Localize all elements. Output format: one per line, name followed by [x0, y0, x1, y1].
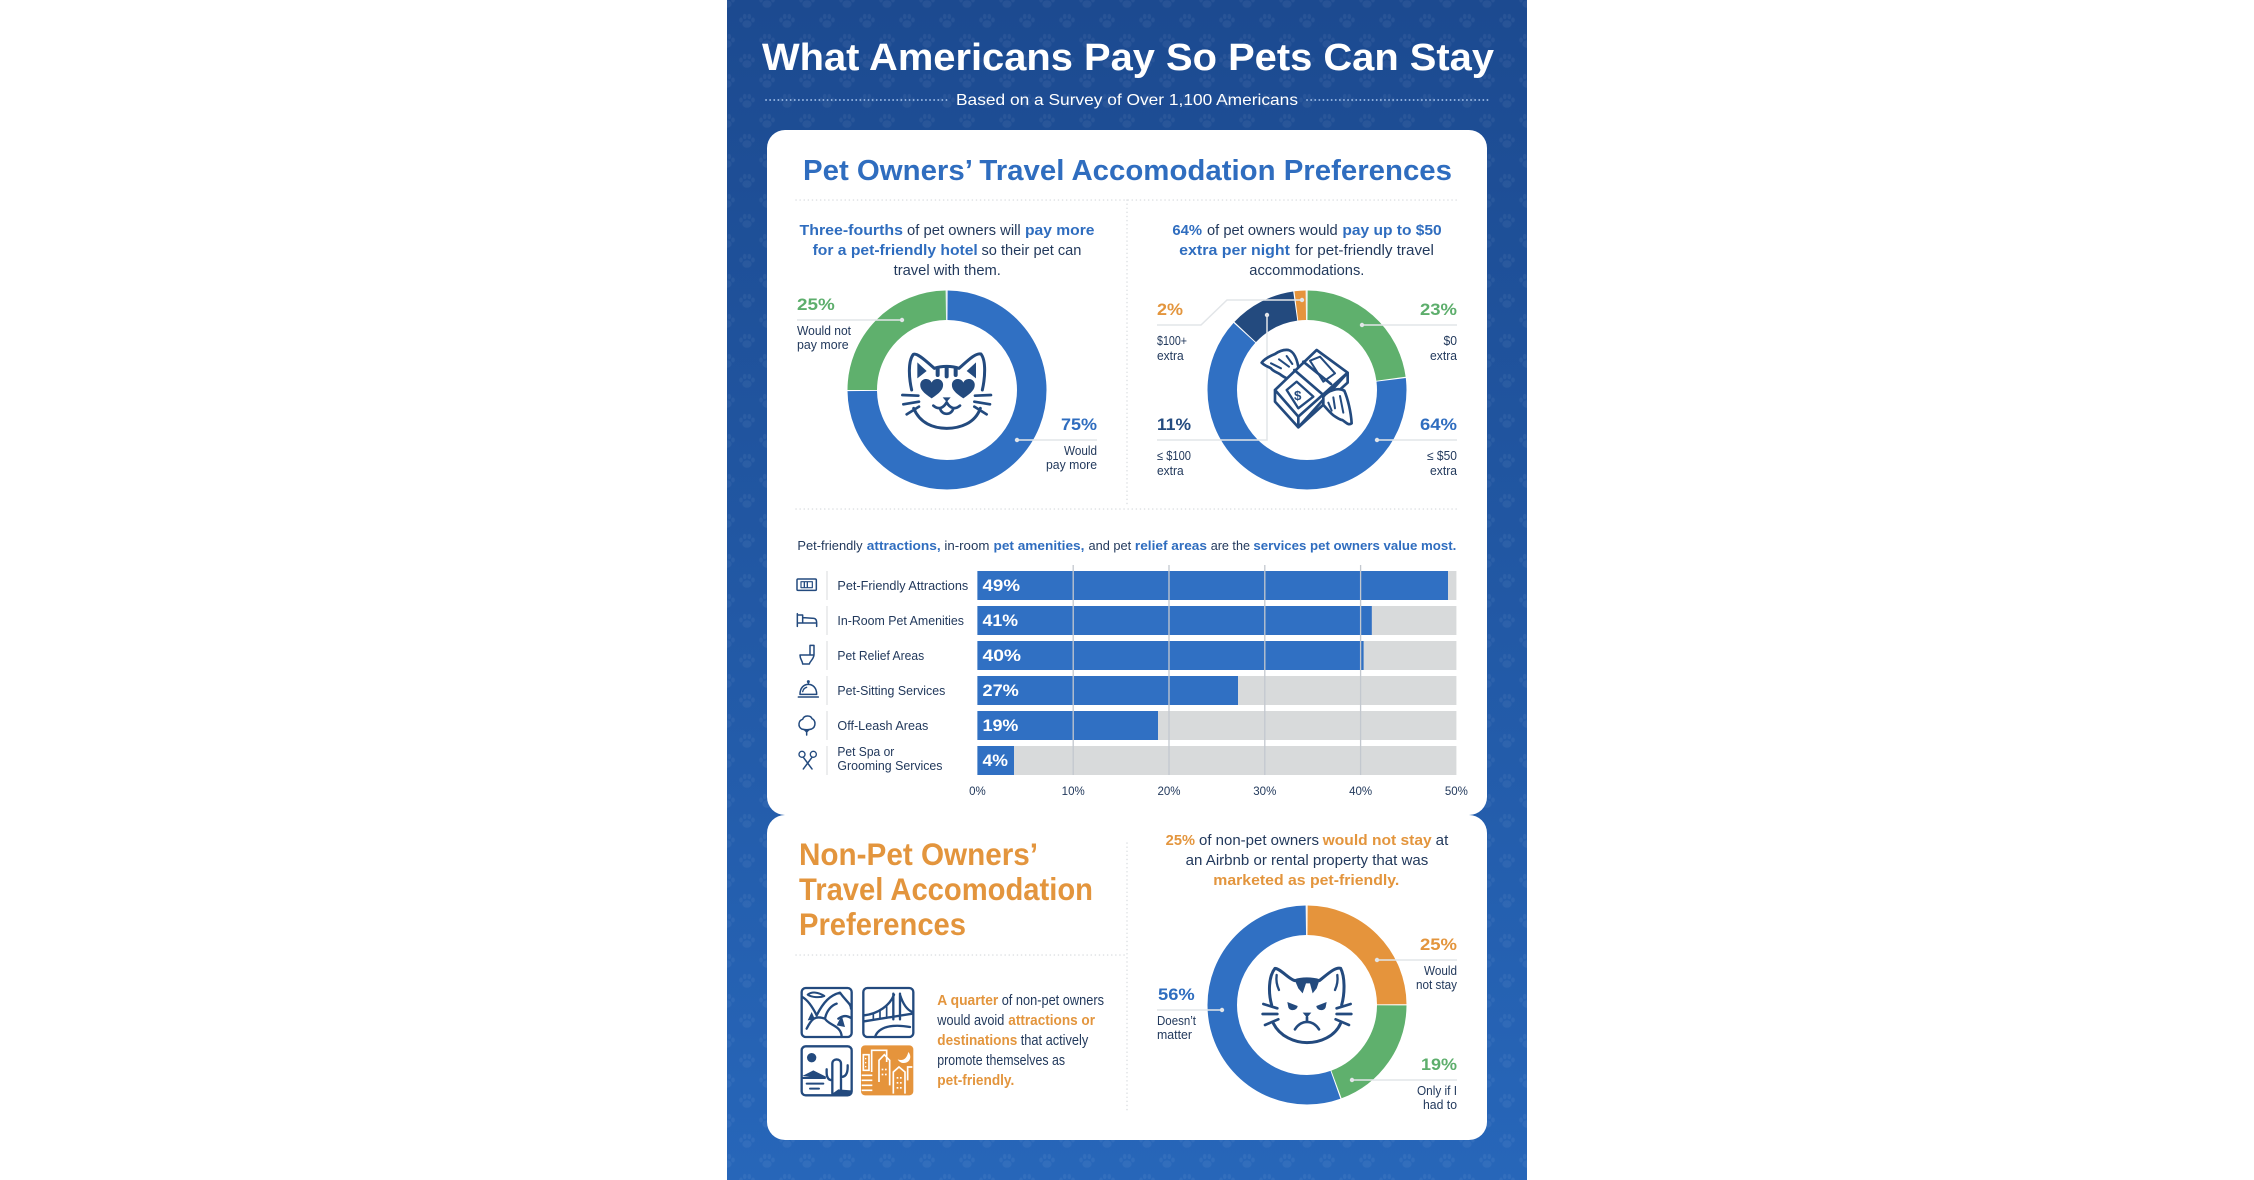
text: 25% would not stay: of non-pet owners [1199, 833, 1319, 849]
label: 56% doesn't matter: 56% [1158, 985, 1195, 1004]
text: services pet owners value most [797, 538, 1456, 553]
label: 25% would not pay more [797, 295, 904, 352]
text: services pet owners value most: and pet [1088, 538, 1132, 553]
icon: bed [797, 614, 817, 626]
bar percentages: 27% [982, 681, 1019, 700]
donut chart: extra per night [1157, 298, 1457, 478]
text: services pet owners value most: Pet-friendly [797, 538, 863, 553]
label: 64% up to $50 extra [1375, 415, 1457, 478]
label: 11% up to $100 extra: extra [1157, 464, 1184, 478]
text: a quarter would avoid: would avoid [936, 1013, 1004, 1029]
text: 25% would not stay: at [1436, 833, 1448, 849]
text: three-fourths pay more: Three-fourths [800, 223, 903, 239]
row labels: In-Room Pet Amenities [837, 614, 964, 628]
text: 25% would not stay: 25% [1166, 833, 1195, 849]
background panel with paw pattern [727, 0, 1527, 1180]
text: 25% would not stay [1166, 833, 1448, 889]
text: 64% pay up to $50: of pet owners would [1207, 223, 1338, 239]
label: 2% $100+ extra: $100+ [1157, 334, 1187, 348]
text: three-fourths pay more [800, 223, 1094, 279]
text: a quarter would avoid [936, 993, 1104, 1089]
row labels: Pet Spa or [837, 745, 894, 759]
text: services pet owners value most: relief areas [1135, 538, 1207, 553]
icon: money with wings: $ [1294, 388, 1302, 403]
icon: ticket [797, 579, 816, 590]
text: a quarter would avoid: A quarter [937, 993, 999, 1009]
row labels: Pet-Sitting Services [837, 684, 945, 698]
text: a quarter would avoid: of non-pet owners [1002, 993, 1104, 1009]
donut chart: would pay more [797, 295, 1097, 475]
label: 23% $0 extra [1360, 300, 1457, 363]
label: 64% up to $50 extra: ≤ $50 [1427, 449, 1457, 463]
bar percentages: 19% [982, 716, 1018, 735]
text: three-fourths pay more: for a pet-friendly hotel [813, 243, 978, 259]
axis labels: 40% [1349, 786, 1372, 798]
bar percentages: 40% [982, 646, 1021, 665]
text: a quarter would avoid: that actively [1021, 1033, 1089, 1049]
icon: toilet [800, 645, 814, 664]
text: 25% would not stay: an Airbnb or rental property that was [1186, 853, 1428, 869]
heading: non-pet owners [799, 836, 1093, 942]
label: 11% up to $100 extra [1157, 313, 1269, 478]
label: 25% would not stay: Would [1424, 964, 1457, 978]
icon: canyon [802, 988, 852, 1037]
label: 11% up to $100 extra: ≤ $100 [1157, 449, 1191, 463]
icon: night city [861, 1045, 913, 1095]
label: 25% would not stay [1375, 935, 1458, 992]
panel: non-pet owners [767, 815, 1487, 1140]
label: 64% up to $50 extra: 64% [1420, 415, 1457, 434]
text: 64% pay up to $50 [1172, 223, 1442, 279]
text: a quarter would avoid: pet-friendly. [937, 1073, 1014, 1089]
label: 56% doesn't matter [1157, 985, 1224, 1042]
label: 25% would not stay: 25% [1420, 935, 1457, 954]
label: 19% only if I had to: Only if I [1417, 1084, 1457, 1098]
icon: angry cat [1263, 968, 1351, 1043]
bar tracks [977, 571, 1456, 775]
label: 56% doesn't matter: Doesn’t [1157, 1014, 1196, 1028]
icon: scissors [799, 751, 816, 769]
heading: non-pet owners: Preferences [799, 906, 966, 942]
label: 23% $0 extra: extra [1430, 349, 1457, 363]
label: 23% $0 extra: 23% [1420, 300, 1457, 319]
bar values [977, 571, 1448, 775]
bar percentages [982, 576, 1021, 770]
title: What Americans Pay So Pets Can Stay [762, 37, 1494, 79]
text: 25% would not stay: marketed as pet-friendly. [1213, 873, 1399, 889]
axis labels: 20% [1157, 786, 1181, 798]
text: a quarter would avoid: destinations [937, 1033, 1017, 1049]
heading: non-pet owners: Travel Accomodation [799, 871, 1093, 907]
label: 25% would not pay more: Would not [797, 324, 852, 338]
label: 25% would not stay: not stay [1416, 978, 1458, 992]
text: three-fourths pay more: pay more [1025, 223, 1094, 239]
text: services pet owners value most: attractions, [867, 538, 941, 553]
label: 19% only if I had to [1350, 1055, 1457, 1112]
row labels [837, 579, 968, 773]
row labels: Pet Relief Areas [837, 649, 924, 663]
bar percentages: 41% [982, 611, 1018, 630]
text: 64% pay up to $50: pay up to $50 [1342, 223, 1442, 239]
label: 2% $100+ extra: 2% [1157, 300, 1183, 319]
text: 64% pay up to $50: accommodations. [1249, 263, 1364, 279]
label: 56% doesn't matter: matter [1157, 1028, 1192, 1042]
panel: pet owners [767, 130, 1487, 815]
heading: pet owners: Pet Owners’ Travel Accomodation Preferences [803, 155, 1452, 187]
text: three-fourths pay more: travel with them. [894, 263, 1001, 279]
bar percentages: 49% [982, 576, 1020, 595]
text: 64% pay up to $50: extra per night [1179, 243, 1290, 259]
subtitle: Based on a Survey of Over 1,100 Americans [956, 92, 1298, 109]
text: three-fourths pay more: so their pet can [982, 243, 1081, 259]
icon: heart-eyes cat [902, 354, 991, 428]
bar chart: valued services [797, 565, 1468, 798]
text: 25% would not stay: would not stay [1322, 833, 1432, 849]
axis labels: 0% [969, 786, 986, 798]
label: 23% $0 extra: $0 [1444, 334, 1457, 348]
text: services pet owners value most: services pet owners value most. [1253, 538, 1456, 553]
label: 75% would pay more [1015, 415, 1097, 472]
icon: money with wings [1262, 350, 1352, 427]
icon: tree [799, 716, 815, 735]
text: services pet owners value most: in-room [944, 538, 989, 553]
label: 19% only if I had to: had to [1423, 1098, 1457, 1112]
text: 64% pay up to $50: 64% [1172, 223, 1202, 239]
donut chart: would not stay [1157, 920, 1458, 1112]
bar percentages: 4% [982, 751, 1008, 770]
icons: destination tiles [802, 988, 913, 1095]
text: services pet owners value most: are the [1211, 538, 1250, 553]
text: three-fourths pay more: of pet owners will [907, 223, 1021, 239]
label: 11% up to $100 extra: 11% [1157, 415, 1191, 434]
heading: non-pet owners: Non-Pet Owners’ [799, 836, 1038, 872]
text: a quarter would avoid: attractions or [1008, 1013, 1095, 1029]
row labels: Grooming Services [837, 759, 942, 773]
label: 64% up to $50 extra: extra [1430, 464, 1457, 478]
label: 75% would pay more: pay more [1046, 458, 1097, 472]
axis labels [969, 786, 1468, 798]
label: 75% would pay more: Would [1064, 444, 1097, 458]
label: 19% only if I had to: 19% [1421, 1055, 1457, 1074]
label: 75% would pay more: 75% [1061, 415, 1097, 434]
icon: bridge [863, 988, 913, 1037]
axis labels: 50% [1445, 786, 1468, 798]
icon: service bell [798, 681, 818, 697]
text: 64% pay up to $50: for pet-friendly travel [1295, 243, 1434, 259]
label: 2% $100+ extra [1157, 298, 1304, 363]
label: 25% would not pay more: pay more [797, 338, 849, 352]
row labels: Pet-Friendly Attractions [837, 579, 968, 593]
axis labels: 10% [1062, 786, 1085, 798]
label: 25% would not pay more: 25% [797, 295, 835, 314]
icon: desert [802, 1046, 852, 1095]
row labels: Off-Leash Areas [837, 719, 928, 733]
text: a quarter would avoid: promote themselves as [937, 1053, 1065, 1069]
axis labels: 30% [1253, 786, 1276, 798]
label: 2% $100+ extra: extra [1157, 349, 1184, 363]
text: services pet owners value most: pet amenities, [994, 538, 1084, 553]
